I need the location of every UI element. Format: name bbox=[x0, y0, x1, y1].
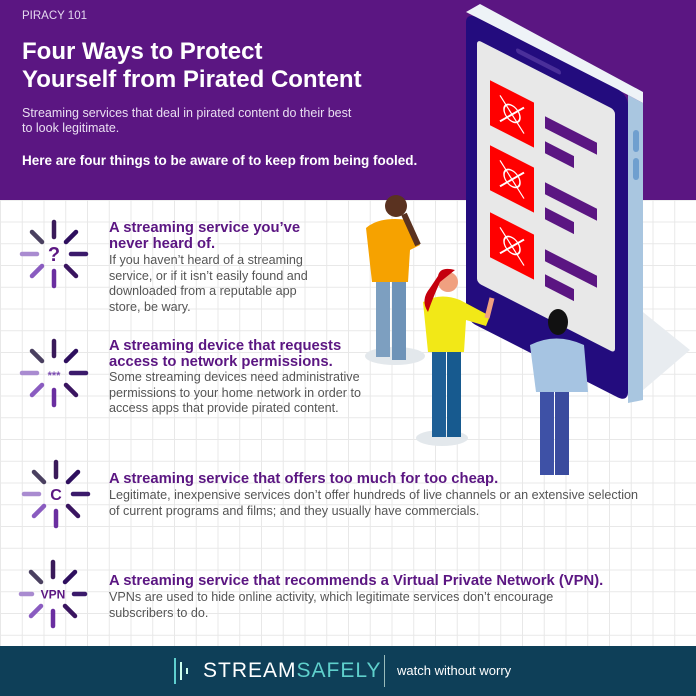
icon: VPN burst bbox=[18, 560, 88, 628]
body 1: If you haven’t heard of a streaming bbox=[109, 253, 303, 267]
heading 1: never heard of. bbox=[109, 236, 215, 252]
heading 4: A streaming service that recommends a Virtual Private Network (VPN). bbox=[109, 573, 603, 589]
tagline: watch without worry bbox=[397, 663, 511, 678]
body 3: Legitimate, inexpensive services don’t offer hundreds of live channels or an extensive selection bbox=[109, 488, 638, 502]
subtitle bbox=[22, 106, 352, 135]
icon: currency burst: C bbox=[50, 487, 62, 504]
title bbox=[22, 38, 362, 93]
person: woman in light blue bbox=[530, 309, 588, 475]
header band bbox=[0, 0, 696, 200]
body 4: VPNs are used to hide online activity, which legitimate services don’t encourage bbox=[109, 590, 553, 604]
body 2: Some streaming devices need administrative bbox=[109, 370, 360, 384]
icon: VPN burst: VPN bbox=[41, 588, 65, 602]
body 1: store, be wary. bbox=[109, 300, 191, 314]
icon: question burst: ? bbox=[48, 244, 60, 266]
person: man in orange bbox=[365, 195, 425, 365]
icon: password burst: *** bbox=[48, 370, 61, 382]
lead line: Here are four things to be aware of to keep from being fooled. bbox=[22, 153, 417, 168]
brand name: STREAMSAFELY bbox=[203, 659, 382, 682]
icon: currency burst bbox=[22, 460, 90, 528]
body 3: of current programs and films; and they usually have commercials. bbox=[109, 504, 479, 518]
phone side bbox=[628, 95, 643, 403]
heading 1: A streaming service you’ve bbox=[109, 220, 300, 236]
body 2: access apps that provide pirated content. bbox=[109, 401, 339, 415]
footer bbox=[0, 646, 696, 696]
person: woman in yellow bbox=[416, 269, 492, 446]
subtitle: to look legitimate. bbox=[22, 121, 119, 135]
heading 2: access to network permissions. bbox=[109, 354, 333, 370]
title: Four Ways to Protect bbox=[22, 38, 262, 65]
heading 3: A streaming service that offers too much for too cheap. bbox=[109, 471, 498, 487]
body 2: permissions to your home network in order to bbox=[109, 386, 361, 400]
body 1: service, or if it isn’t easily found and bbox=[109, 268, 308, 282]
kicker: PIRACY 101: PIRACY 101 bbox=[22, 10, 87, 22]
icon: password burst bbox=[20, 338, 88, 408]
phone shadow bbox=[628, 300, 690, 403]
title: Yourself from Pirated Content bbox=[22, 66, 362, 93]
item 1 bbox=[20, 220, 308, 314]
icon: question burst bbox=[20, 220, 88, 288]
item 2 bbox=[20, 338, 361, 415]
heading 1 bbox=[109, 220, 300, 252]
heading 2: A streaming device that requests bbox=[109, 338, 341, 354]
body 3 bbox=[109, 488, 638, 518]
divider bbox=[384, 655, 385, 687]
item 3 bbox=[22, 460, 638, 528]
heading 2 bbox=[109, 338, 341, 370]
item 4 bbox=[18, 560, 603, 628]
body 4: subscribers to do. bbox=[109, 606, 208, 620]
subtitle: Streaming services that deal in pirated content do their best bbox=[22, 106, 351, 120]
pirate images bbox=[490, 80, 534, 280]
body 2 bbox=[109, 370, 361, 415]
phone front bbox=[466, 12, 628, 403]
body 4 bbox=[109, 590, 553, 620]
body 1 bbox=[109, 253, 308, 314]
body 1: downloaded from a reputable app bbox=[109, 284, 297, 298]
logo mark bbox=[174, 658, 188, 684]
